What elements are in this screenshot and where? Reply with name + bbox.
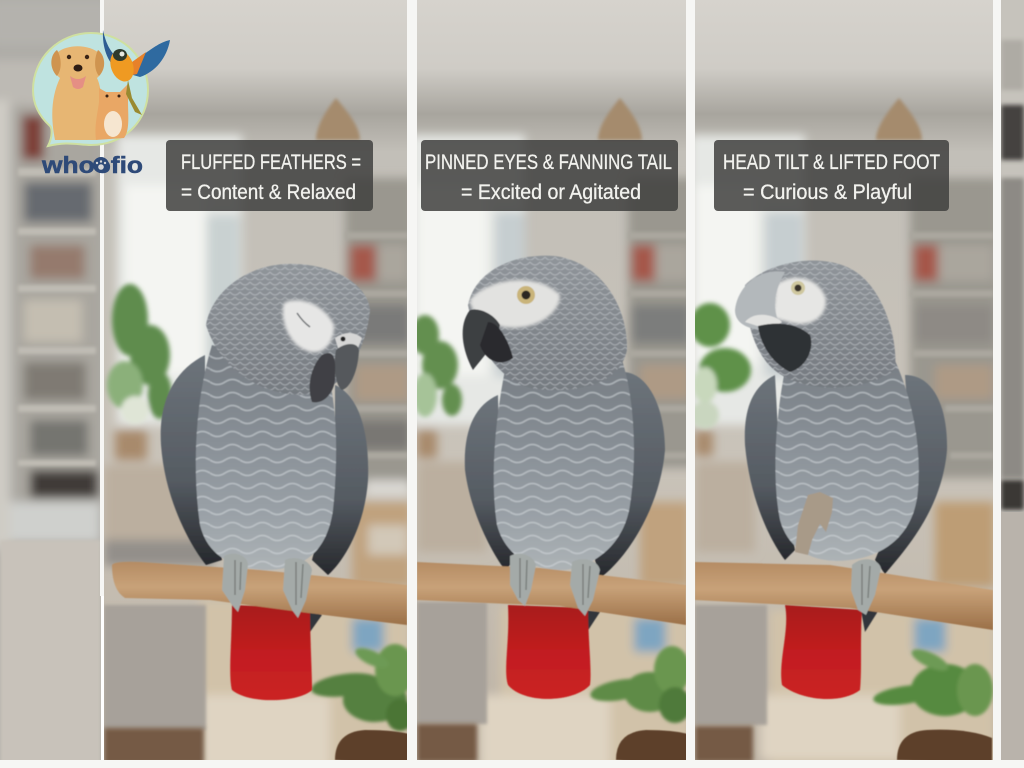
white face patch (470, 280, 560, 328)
body (775, 350, 919, 561)
neck and head (745, 261, 895, 388)
closed eye (297, 313, 310, 327)
right wing (875, 375, 947, 574)
body (196, 345, 336, 570)
icon: window plant (690, 303, 751, 429)
caption 2 (421, 140, 678, 211)
panel: room background 3 (690, 0, 1000, 765)
left wing (465, 395, 515, 570)
dark tail base (860, 605, 880, 632)
chest feather texture (196, 345, 336, 570)
parrot 3: head tilt and lifted foot (695, 261, 993, 699)
panel: left edge room (0, 0, 110, 765)
standing foot (851, 559, 881, 615)
chest feather texture (775, 350, 919, 561)
tail (781, 605, 862, 699)
perch (112, 562, 407, 625)
logo wordmark: whoofio (41, 152, 143, 178)
caption 1: = Content & Relaxed (181, 181, 356, 204)
right wing (595, 372, 665, 578)
logo: Whoofio (33, 30, 170, 178)
caption 3: HEAD TILT & LIFTED FOOT (723, 151, 940, 174)
icon: floor plant (872, 645, 993, 716)
caption 3 (714, 140, 949, 211)
upper beak (463, 309, 500, 370)
left wing (161, 355, 222, 565)
lower beak (480, 322, 513, 362)
chest feather texture (494, 360, 634, 570)
head (468, 256, 627, 390)
icon: dog (51, 46, 104, 140)
left wing (745, 375, 795, 560)
nostril patch (745, 315, 782, 330)
caption 1: FLUFFED FEATHERS = (181, 151, 361, 174)
white face patch (283, 300, 334, 352)
icon: macaw (103, 30, 170, 115)
dark tail base (305, 610, 322, 632)
caption 1 (166, 140, 373, 211)
icon: floor plant (310, 644, 415, 731)
head (206, 264, 370, 395)
eye (791, 281, 805, 295)
body (494, 360, 634, 570)
logo speech bubble (33, 33, 148, 146)
lifted foot (795, 492, 833, 555)
panel: room background 2 (410, 0, 698, 768)
cere (335, 333, 362, 348)
left foot (222, 554, 248, 612)
right foot (283, 558, 312, 618)
head feather texture (745, 261, 895, 388)
eye (517, 286, 535, 304)
caption 2: = Excited or Agitated (461, 181, 641, 204)
right foot (570, 559, 600, 616)
head feather texture (206, 264, 370, 395)
perch (695, 562, 993, 630)
right wing (312, 385, 368, 575)
left foot (510, 554, 536, 606)
dark tail base (582, 610, 600, 635)
icon: cat (95, 84, 128, 140)
beak (335, 344, 359, 390)
white face patch (773, 278, 826, 324)
icon: floor plant (589, 646, 691, 723)
cere and upper head (735, 271, 785, 330)
tail (506, 605, 591, 699)
caption 3: = Curious & Playful (743, 181, 912, 204)
head feather texture (468, 256, 627, 390)
beak (758, 324, 811, 372)
icon: window plant (107, 284, 172, 424)
parrot 1: fluffed feathers (112, 264, 407, 700)
lower beak feathers (310, 353, 335, 402)
panel: room background 1 (104, 0, 415, 768)
tail (230, 605, 312, 700)
panel: right edge room (1001, 0, 1024, 762)
icon: window plant (411, 315, 462, 417)
caption 2: PINNED EYES & FANNING TAIL (425, 151, 672, 174)
perch (417, 562, 686, 625)
parrot 2: pinned eyes (417, 256, 686, 699)
